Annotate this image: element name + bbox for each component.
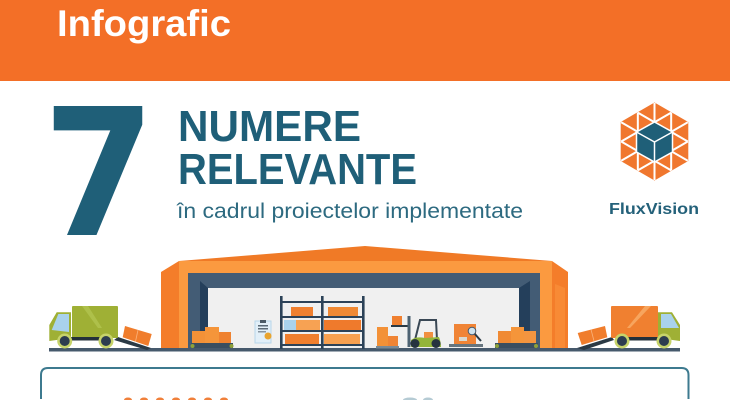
bottom content panel: [41, 368, 688, 400]
logo: FluxVision hexagon: [621, 103, 688, 180]
pallet of boxes: [376, 327, 399, 348]
left cart with boxes: [190, 327, 234, 348]
right truck: [577, 306, 680, 350]
icon: clipboard: [255, 320, 272, 343]
inspected box with magnifier: [449, 324, 483, 347]
warehouse building: [161, 246, 568, 349]
heading: [178, 102, 417, 194]
storage shelves with boxes: [280, 296, 365, 349]
ground line: [49, 348, 680, 352]
subheading: în cadrul proiectelor implementate: [176, 199, 523, 223]
cropped figure tops: [403, 398, 433, 400]
heading: RELEVANTE: [178, 145, 417, 194]
left truck boxes on ramp: [123, 326, 152, 346]
heading: NUMERE: [178, 102, 361, 151]
big number 7: 7: [43, 71, 155, 277]
right truck boxes on ramp: [578, 326, 607, 345]
header banner: [0, 0, 730, 81]
forklift: [391, 316, 441, 348]
left truck: [49, 306, 151, 350]
logo wordmark: FluxVision: [609, 201, 699, 218]
row of orange dots: [124, 398, 228, 400]
right cart with boxes: [495, 327, 538, 348]
banner title: Infografic: [57, 3, 231, 44]
